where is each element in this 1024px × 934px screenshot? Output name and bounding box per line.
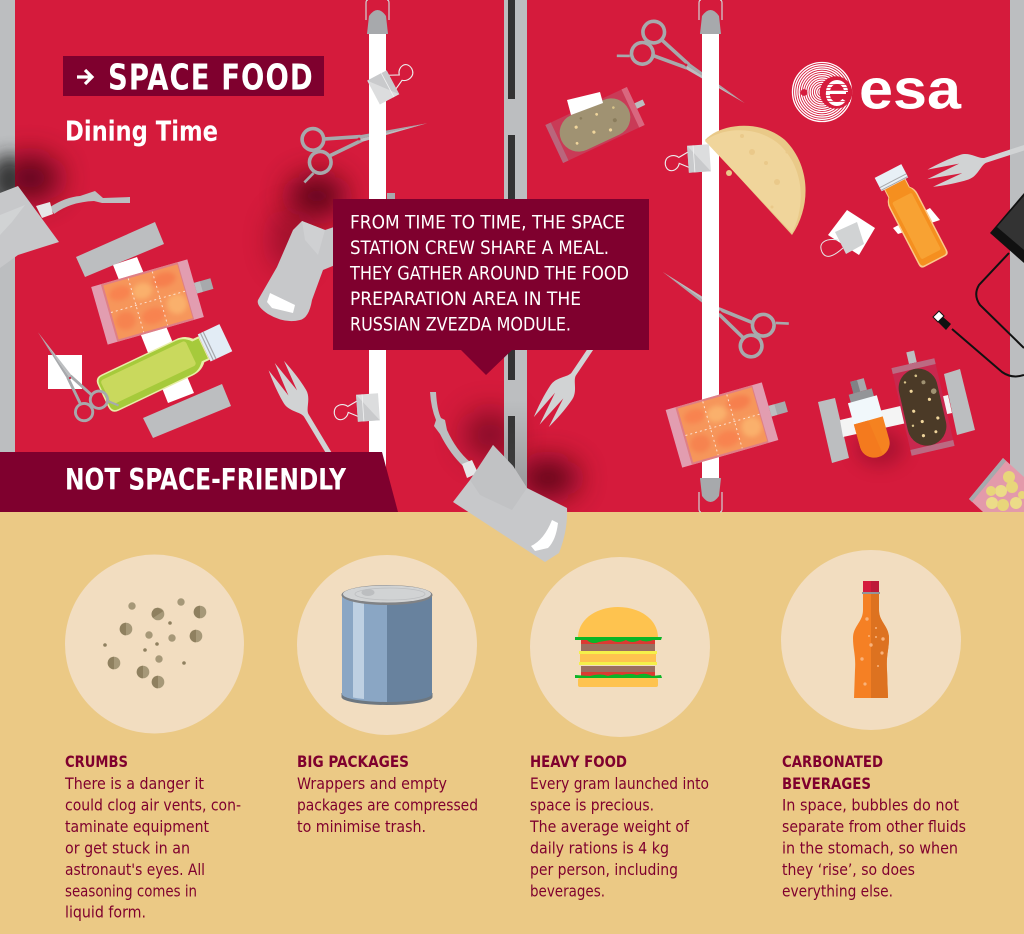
white strap <box>840 395 952 437</box>
callout <box>333 199 649 375</box>
panel: carbonated beverages <box>781 550 966 900</box>
panel: heavy food <box>529 557 710 900</box>
tortilla <box>705 126 806 235</box>
brown food packet, top <box>545 87 646 163</box>
white card behind small scissors <box>48 355 82 389</box>
subtitle: Dining Time <box>65 116 218 148</box>
white strap <box>113 257 194 403</box>
orange drink container <box>843 376 893 461</box>
bottom-right food assembly <box>818 347 975 463</box>
body text <box>782 796 966 900</box>
body text: or get stuck in an <box>65 838 190 858</box>
icon: soda bottle <box>781 550 961 730</box>
section banner: not space-friendly <box>0 452 398 512</box>
background: tan lower panel <box>0 512 1024 934</box>
dark food packet <box>889 347 955 456</box>
body text: could clog air vents, con- <box>65 796 241 814</box>
callout: STATION CREW SHARE A MEAL. <box>350 238 609 259</box>
right grey rail <box>1010 0 1024 512</box>
left strap with caps <box>366 0 389 512</box>
drive body <box>990 193 1024 263</box>
body text: packages are compressed <box>297 796 478 814</box>
logotype: esa <box>859 58 962 122</box>
orange bottle <box>874 164 949 269</box>
green bottle <box>94 320 234 414</box>
panel: crumbs <box>64 554 244 922</box>
callout: FROM TIME TO TIME, THE SPACE <box>350 212 625 234</box>
icon: tin can <box>297 555 477 735</box>
body text: astronaut's eyes. All <box>65 860 205 879</box>
centre grey rail with dark slots <box>504 0 527 512</box>
yellow snack pouch, bottom right <box>969 458 1024 512</box>
binder clip on left strap, top <box>367 64 414 104</box>
body text: per person, including <box>530 860 678 879</box>
body text: beverages. <box>530 882 605 900</box>
scissors, lower left <box>38 332 119 422</box>
binder clip on tortilla <box>664 144 711 174</box>
scissors under right strap, top <box>616 20 744 103</box>
right strap with caps <box>699 0 722 512</box>
food pouch, crossing lower panel <box>430 392 567 562</box>
orange food packet on right strap <box>666 378 795 468</box>
scissors under right strap, middle <box>663 272 789 359</box>
binder clip on left strap, bottom <box>333 393 380 423</box>
callout: THEY GATHER AROUND THE FOOD <box>349 264 629 284</box>
grey velcro bar, bottom <box>143 384 231 438</box>
fork, lower left <box>268 361 332 452</box>
paper and clip, right of tortilla <box>821 208 940 256</box>
body text: There is a danger it <box>64 774 204 793</box>
left food assembly: straps, packet, bottle <box>76 222 234 438</box>
orange food packet <box>91 255 220 345</box>
food pouch, left edge <box>0 186 130 268</box>
icon: crumbs <box>65 554 244 734</box>
body text: The average weight of <box>529 817 690 836</box>
heading: BIG PACKAGES <box>297 752 409 771</box>
body text: In space, bubbles do not <box>782 796 959 814</box>
icon: burger <box>530 557 710 737</box>
title badge <box>63 56 324 98</box>
body text: in the stomach, so when <box>782 838 958 858</box>
body text <box>529 774 709 900</box>
body text <box>64 774 241 922</box>
body text: liquid form. <box>65 902 146 922</box>
heading <box>782 752 883 793</box>
heading: CARBONATED <box>782 752 883 771</box>
external hard drive and cables <box>933 193 1024 376</box>
fork, upper right <box>928 145 1024 187</box>
heading: BEVERAGES <box>782 774 871 793</box>
grey velcro bar, top <box>76 222 164 277</box>
grey bars <box>818 398 849 463</box>
body text: taminate equipment <box>65 817 209 836</box>
callout: PREPARATION AREA IN THE <box>350 289 581 310</box>
scissors under left strap <box>300 123 427 184</box>
section banner: not space-friendly: NOT SPACE-FRIENDLY <box>65 462 347 496</box>
callout: RUSSIAN ZVEZDA MODULE. <box>350 314 571 336</box>
white tag on brown packet <box>567 92 603 115</box>
ESA logo <box>792 58 962 122</box>
fork, centre under callout <box>534 350 593 427</box>
left grey rail <box>0 0 15 452</box>
USB plug <box>933 311 944 322</box>
food pouch, centre <box>258 193 395 321</box>
body text <box>297 774 478 836</box>
title text: SPACE FOOD <box>108 56 313 98</box>
body text: everything else. <box>782 882 893 900</box>
heading: HEAVY FOOD <box>530 752 627 771</box>
heading: CRUMBS <box>65 752 128 771</box>
body text: daily rations is 4 kg <box>530 838 669 858</box>
body text: seasoning comes in <box>65 882 197 900</box>
body text: space is precious. <box>530 796 654 814</box>
background: red wall <box>0 0 1024 512</box>
panel: big packages <box>297 555 478 836</box>
body text: they ‘rise’, so does <box>782 860 915 879</box>
floating package shadows <box>0 156 904 496</box>
body text: separate from other fluids <box>782 817 966 836</box>
arrow icon <box>77 70 92 84</box>
body text: Wrappers and empty <box>297 774 447 793</box>
body text: to minimise trash. <box>297 817 426 836</box>
body text: Every gram launched into <box>530 774 709 793</box>
